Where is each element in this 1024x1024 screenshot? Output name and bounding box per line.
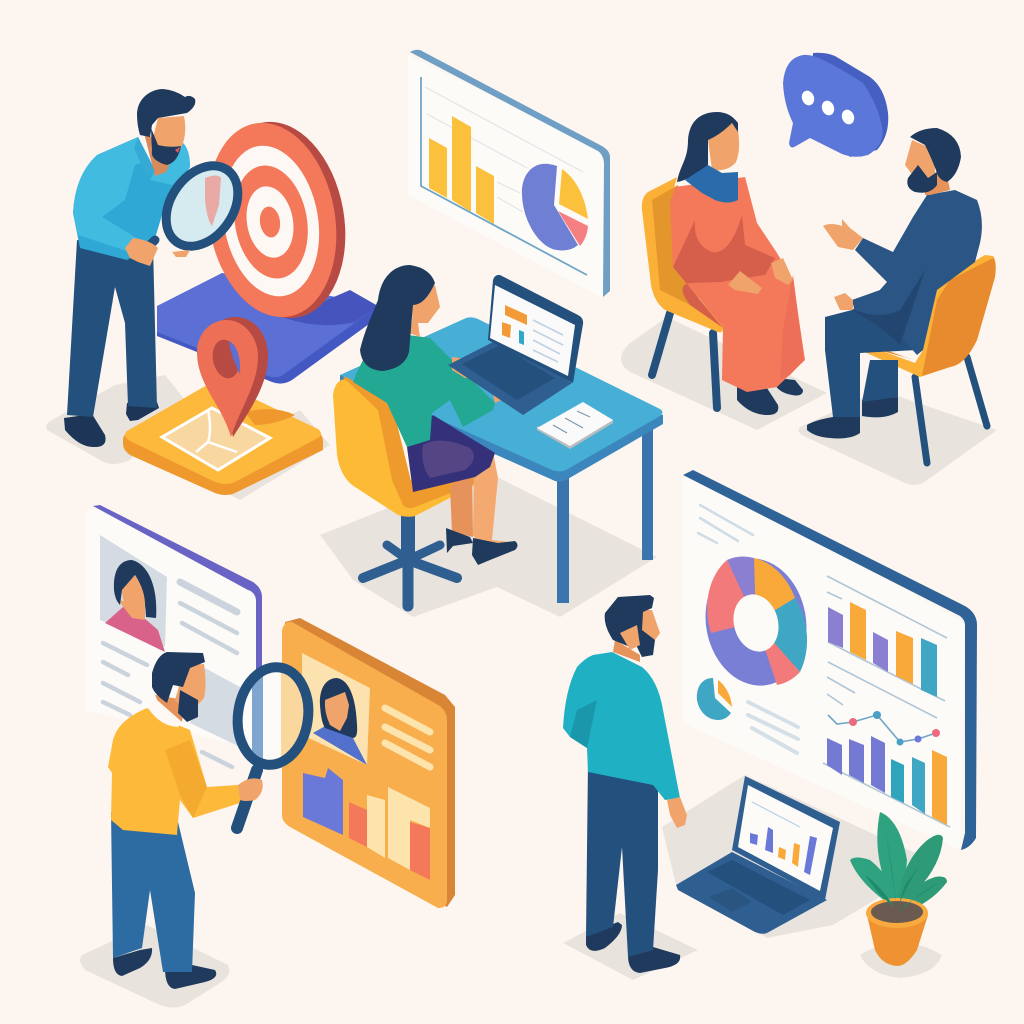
- donut chart: [696, 550, 816, 694]
- seated woman: [670, 112, 805, 415]
- lower bar chart: [823, 736, 950, 827]
- pie chart: [522, 164, 588, 250]
- magnifier lens: [252, 672, 304, 758]
- profile card: [85, 505, 262, 767]
- panel: target and location scene: [46, 89, 380, 500]
- notebook: [537, 402, 613, 449]
- panel: profile review scene: [80, 505, 455, 1008]
- icon: blue platform: [157, 273, 380, 384]
- icon: bullseye target: [193, 111, 360, 329]
- line chart: [828, 711, 940, 746]
- laptop: [448, 275, 583, 415]
- panel: top chart board: [408, 50, 610, 298]
- chair: [333, 377, 476, 606]
- standing man: [563, 595, 687, 973]
- man's chair: [858, 255, 996, 463]
- woman's chair: [642, 177, 723, 408]
- panel: conversation scene: [621, 53, 997, 485]
- bar chart: [429, 116, 494, 224]
- small pie chart: [697, 678, 732, 720]
- panel: woman at desk: [320, 265, 663, 617]
- icon: map tile: [123, 383, 323, 495]
- man with magnifying glass: [108, 652, 315, 989]
- dashboard board: [682, 470, 977, 850]
- laptop: [676, 776, 840, 934]
- seated man: [807, 128, 982, 438]
- woman: [353, 265, 522, 565]
- panel: analytics dashboard scene: [563, 470, 977, 980]
- upper bar chart: [827, 576, 947, 718]
- icon: speech bubble: [783, 53, 888, 157]
- plant: [850, 812, 947, 966]
- desk: [340, 317, 663, 603]
- icon: location pin: [197, 317, 268, 437]
- orange card: [282, 618, 455, 908]
- figure: man with magnifier: [64, 89, 253, 447]
